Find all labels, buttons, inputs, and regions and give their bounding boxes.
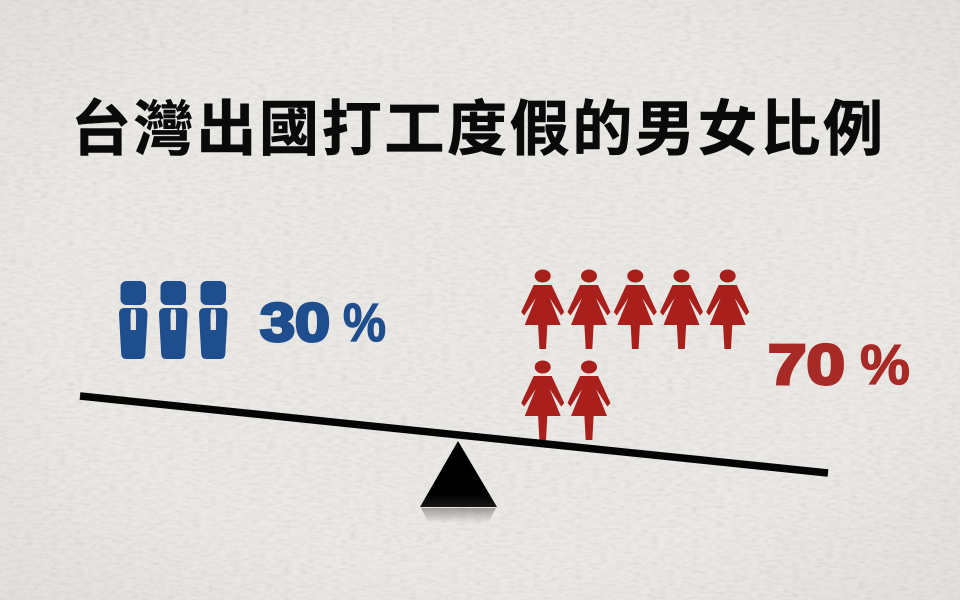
icon: woman 7 [568,360,610,440]
female percentage: 70 % [768,333,910,397]
icon: woman 6 [521,360,564,440]
icon: man 2 [159,281,188,359]
male percentage: 30 % [260,293,386,353]
female percentage: 70 %: % [860,333,910,397]
title: 台灣出國打工度假的男女比例 [71,96,883,163]
icon: woman 2 [568,270,610,349]
male percentage: 30 %: % [343,293,386,353]
icon: woman 1 [521,270,564,349]
male icons: three blue men [119,281,228,359]
balance beam [80,396,828,473]
female icons: seven red women [521,270,749,440]
icon: woman 5 [706,270,749,349]
fulcrum reflection [421,508,496,523]
icon: woman 4 [660,270,703,349]
female percentage: 70 %: 70 [768,333,845,397]
icon: woman 3 [614,270,657,349]
fulcrum triangle [420,441,497,507]
icon: man 1 [119,281,148,359]
icon: man 3 [199,281,228,359]
male percentage: 30 %: 30 [260,293,330,353]
